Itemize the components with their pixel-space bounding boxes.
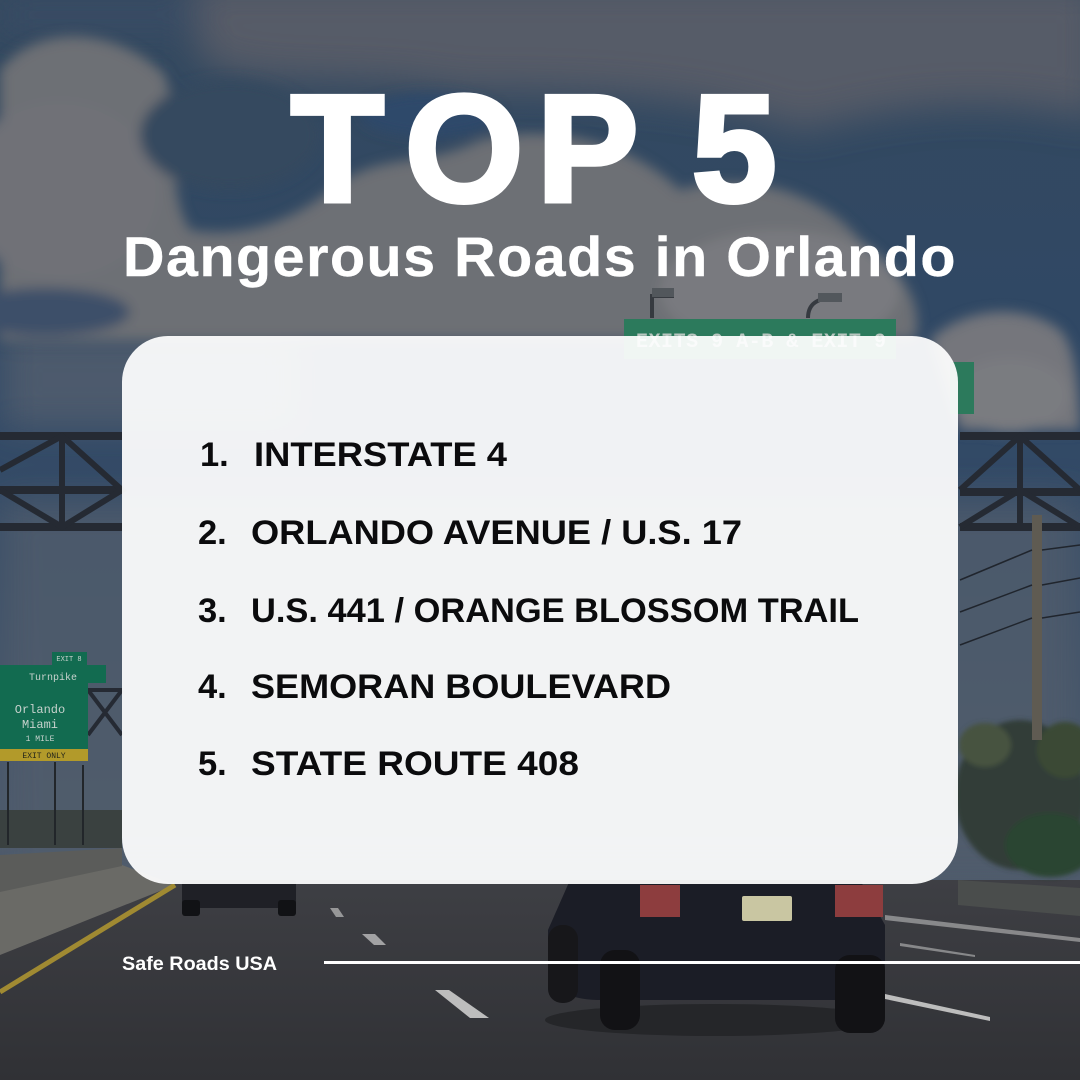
list item 3: U.S. 441 / ORANGE BLOSSOM TRAIL: [251, 592, 859, 630]
background photo: highway under cloudy sky: EXIT 8: [56, 656, 82, 664]
list item 2: ORLANDO AVENUE / U.S. 17: [251, 514, 742, 552]
verge left: [0, 865, 175, 955]
gantry beams: [0, 436, 1080, 735]
overhead sign: [624, 319, 896, 359]
trees right: [955, 720, 1080, 877]
left distant scenery: [0, 810, 122, 848]
list of roads: [198, 436, 859, 783]
list item 4: 4.: [198, 668, 227, 706]
list item 3: 3.: [198, 592, 227, 630]
background photo: highway under cloudy sky: Orlando: [15, 703, 65, 717]
panel: road list card: [122, 336, 958, 884]
footer brand: Safe Roads USA: [122, 954, 277, 975]
roadside sign: [0, 665, 88, 749]
list item 2: 2.: [198, 514, 227, 552]
title: TOP 5: TOP 5: [291, 64, 777, 234]
road: [0, 880, 1080, 1080]
subtitle: Dangerous Roads in Orlando: [123, 225, 957, 288]
background photo: highway under cloudy sky: EXIT ONLY: [22, 752, 66, 761]
list item 5: STATE ROUTE 408: [251, 745, 579, 783]
list item 5: 5.: [198, 745, 227, 783]
background photo: highway under cloudy sky: Turnpike: [29, 672, 77, 684]
car: [545, 880, 885, 1036]
background photo: highway under cloudy sky: EXITS 9 A-B & EXIT 9: [636, 331, 886, 354]
lane markings: [330, 908, 1080, 1021]
truck ahead: [182, 880, 296, 908]
clouds: [0, 37, 917, 340]
utility pole: [1032, 515, 1042, 740]
dark blue gap under left cloud: [0, 288, 130, 336]
list item 1: INTERSTATE 4: [254, 436, 507, 474]
background photo: highway under cloudy sky: Miami: [22, 718, 58, 732]
list item 4: SEMORAN BOULEVARD: [251, 668, 671, 706]
list item 1: 1.: [200, 436, 229, 474]
background photo: highway under cloudy sky: 1 MILE: [26, 735, 55, 744]
